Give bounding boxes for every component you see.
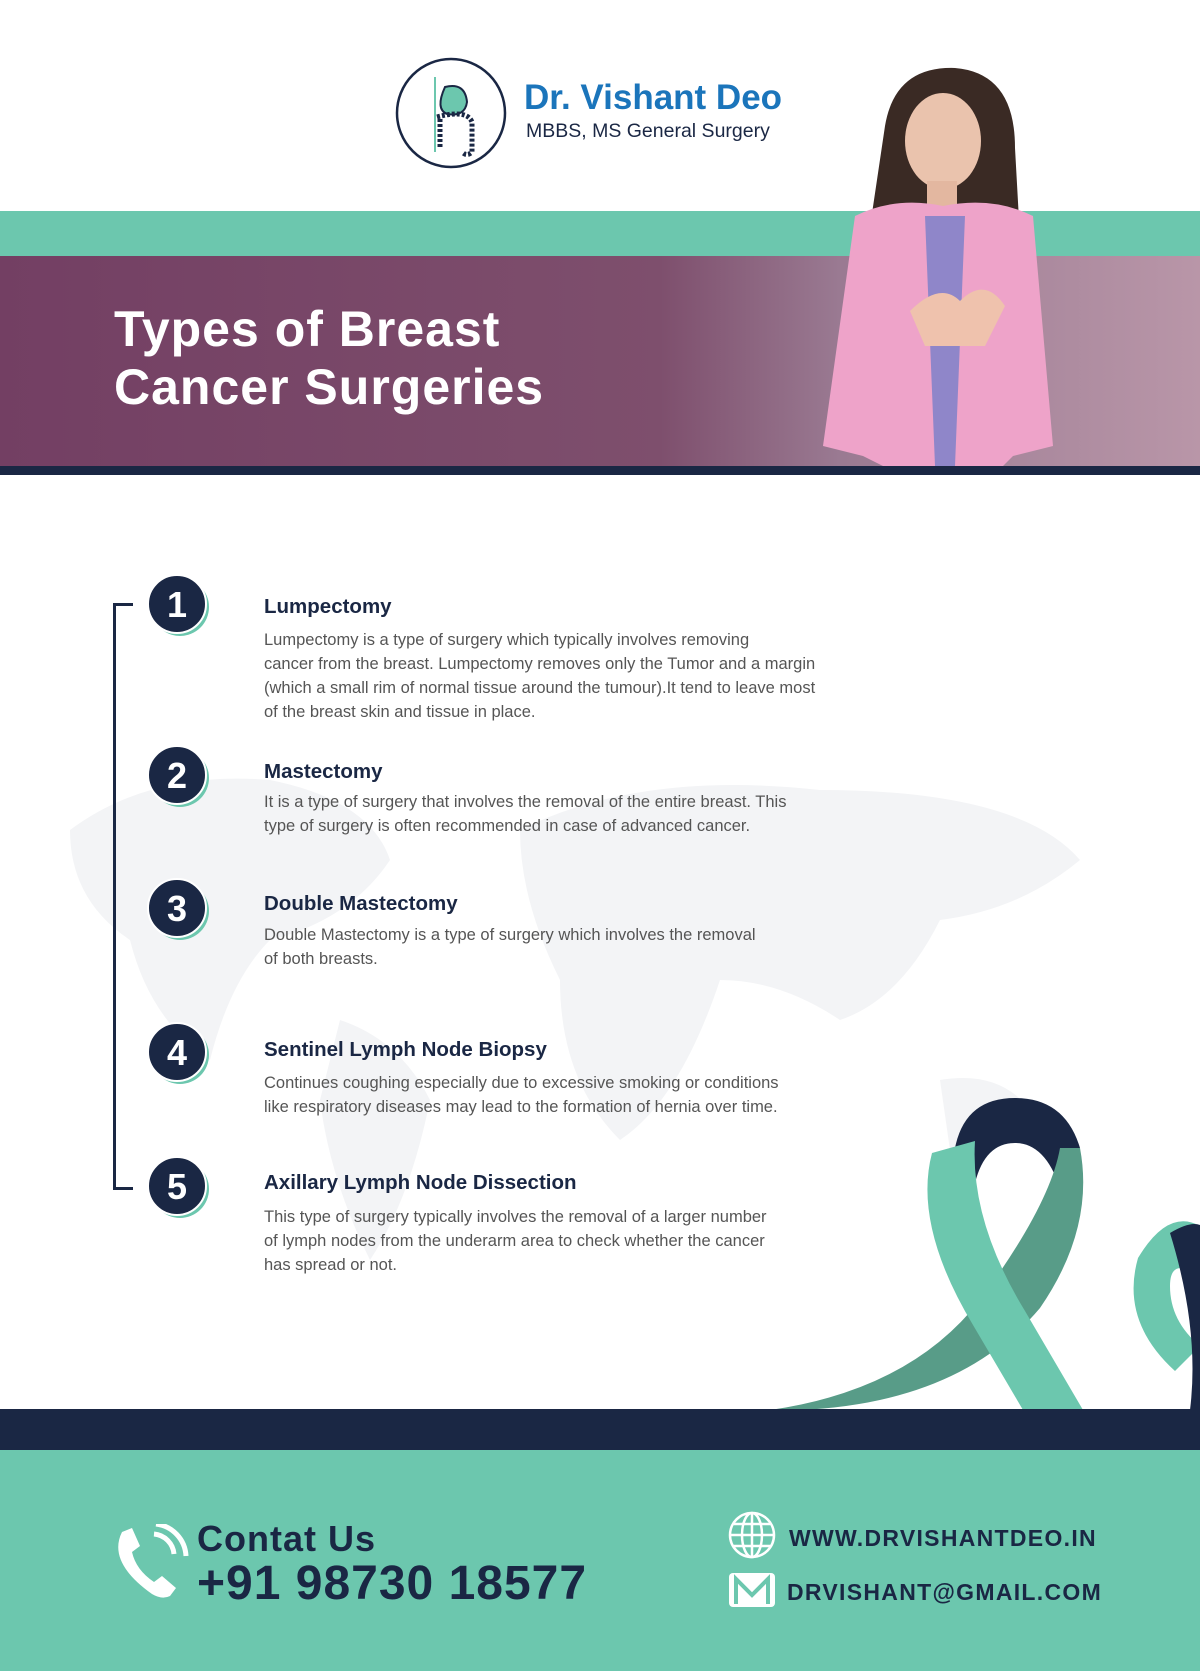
icon: phone [118,1524,188,1598]
navy footer band [0,1409,1200,1450]
text: Lumpectomy: of the breast skin and tissue in place. [264,703,536,721]
step 3: 3 [167,888,187,929]
step 4 [149,1022,209,1084]
step 1 [149,576,209,636]
contact label: Contat Us [197,1518,376,1559]
timeline line [113,603,133,1190]
logo [396,58,506,168]
website: WWW.DRVISHANTDEO.IN [789,1525,1097,1551]
step 4: 4 [167,1032,187,1073]
qualification: MBBS, MS General Surgery [526,120,770,142]
text: Double Mastectomy [264,926,756,968]
text: Lumpectomy: Lumpectomy is a type of surgery which typically involves removing [264,631,749,649]
teal band [0,211,1200,256]
heading: Lumpectomy: Lumpectomy [264,595,392,618]
phone number: +91 98730 18577 [197,1557,587,1610]
heading: Sentinel: Sentinel Lymph Node Biopsy [264,1038,547,1061]
footer contact panel [0,1450,1200,1671]
text: Lumpectomy: (which a small rim of normal tissue around the tumour).It tend to leave most [264,679,815,697]
text: Mastectomy: type of surgery is often recommended in case of advanced cancer. [264,817,750,835]
heading: Mastectomy: Mastectomy [264,760,382,783]
text: Axillary: This type of surgery typically involves the removal of a larger number [264,1208,767,1226]
text: Axillary [264,1208,767,1274]
text: Sentinel: like respiratory diseases may lead to the formation of hernia over time. [264,1098,778,1116]
step 2: 2 [167,755,187,796]
heading: Double Mastectomy: Double Mastectomy [264,892,458,915]
text: Sentinel: Continues coughing especially due to excessive smoking or conditions [264,1074,779,1092]
text: Axillary: of lymph nodes from the underarm area to check whether the cancer [264,1232,765,1250]
text: Double Mastectomy: Double Mastectomy is a type of surgery which involves the removal [264,926,756,944]
ribbon [776,1098,1200,1409]
step 5: 5 [167,1166,187,1207]
text: Lumpectomy [264,631,816,721]
step 2 [149,747,209,807]
title: Cancer Surgeries [114,359,544,415]
text: Mastectomy [264,793,786,835]
email: DRVISHANT@GMAIL.COM [787,1579,1102,1605]
step 1: 1 [167,584,187,625]
text: Double Mastectomy: of both breasts. [264,950,378,968]
text: Mastectomy: It is a type of surgery that involves the removal of the entire breast. This [264,793,786,811]
step 5 [149,1158,209,1218]
step 3 [147,878,209,940]
doctor name: Dr. Vishant Deo [524,78,782,117]
navy strip [0,466,1200,475]
heading: Axillary: Axillary Lymph Node Dissection [264,1171,577,1194]
icon: email [729,1573,775,1607]
text: Lumpectomy: cancer from the breast. Lumpectomy removes only the Tumor and a margin [264,655,815,673]
title [114,301,544,415]
icon: globe [728,1512,776,1558]
purple banner [0,256,1200,466]
text: Sentinel [264,1074,779,1116]
world map background [70,778,1080,1260]
woman photo [823,68,1053,466]
text: Axillary: has spread or not. [264,1256,397,1274]
title: Types of Breast [114,301,500,357]
